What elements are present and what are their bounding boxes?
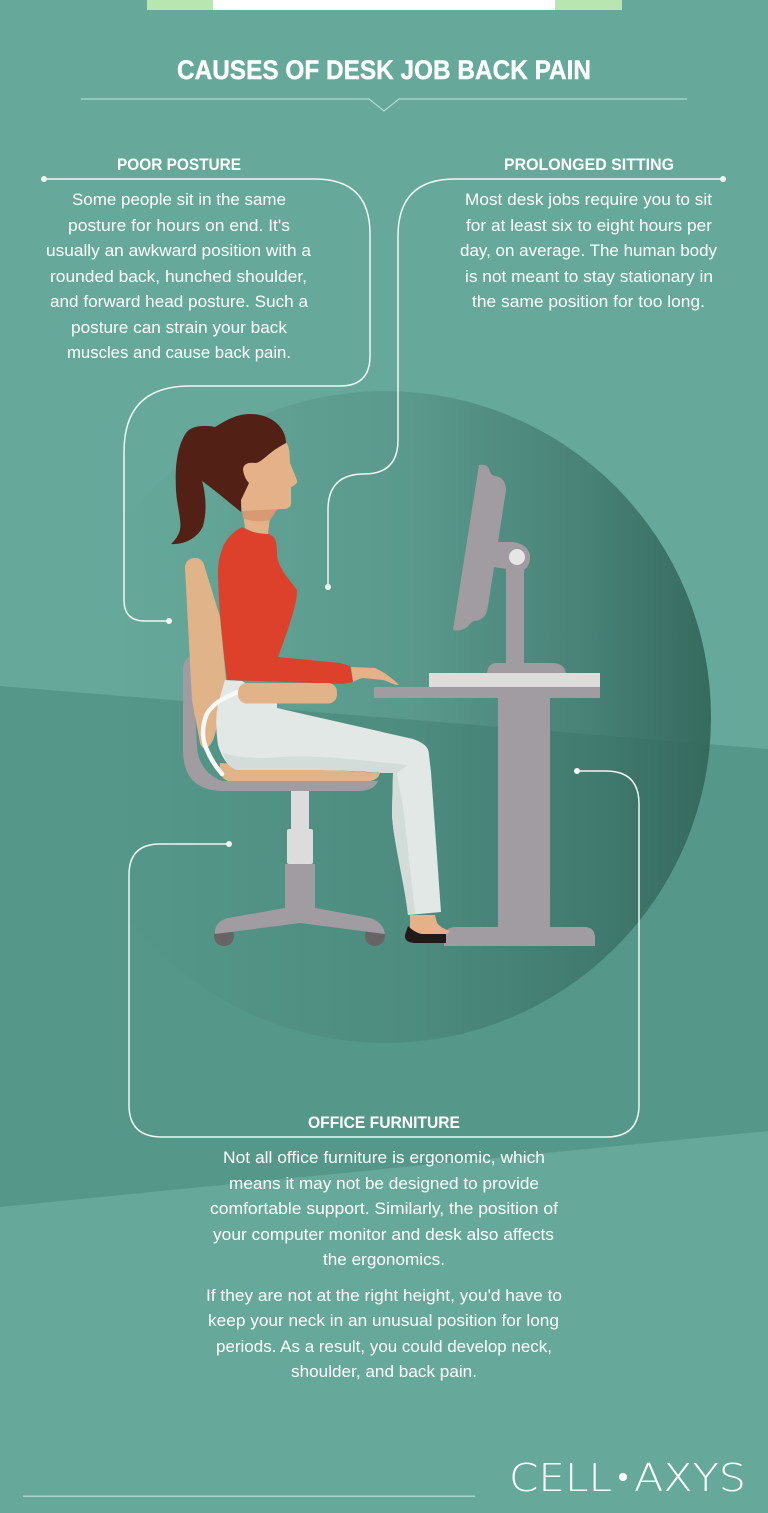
sweater [218,527,353,684]
connector: poor posture [41,176,370,624]
text block: poor posture: muscles and cause back pain. [67,344,291,362]
title rule with chevron [81,99,687,111]
icon: monitor [453,465,530,631]
monitor pivot [509,549,525,565]
chair base [215,864,385,934]
text block: office furniture: If they are not at the right height, you'd have to [206,1287,562,1305]
lumbar support curve [203,692,238,774]
logo [509,1456,746,1500]
connector: office furniture [129,768,639,1137]
text block: poor posture: and forward head posture. Such a [50,293,309,311]
text block: poor posture: Some people sit in the same [72,191,286,209]
text block: poor posture: posture for hours on end. It's [68,217,290,235]
darker diagonal band [0,686,768,1207]
connector: prolonged sitting [325,176,726,590]
neck shadow [242,509,277,521]
shaded circle backdrop [59,391,711,1043]
heading: poor posture: POOR POSTURE [117,156,241,174]
desk top [374,687,600,698]
text block: poor posture: rounded back, hunched shoulder, [50,268,307,286]
footer rule [23,1496,475,1497]
forearm [238,683,337,704]
text block: prolonged sitting: day, on average. The human body [460,242,718,260]
hand [351,667,399,685]
text block: office furniture: your computer monitor and desk also affects [213,1226,554,1244]
title: CAUSES OF DESK JOB BACK PAIN [177,55,591,85]
text block: office furniture: periods. As a result, you could develop neck, [216,1338,552,1356]
desk base [444,927,595,946]
text block: office furniture: Not all office furniture is ergonomic, which [223,1149,545,1167]
text block: office furniture: shoulder, and back pain. [291,1363,477,1381]
illustration: chair and seated woman [171,414,450,946]
keyboard [429,673,600,687]
text block: prolonged sitting [460,191,718,311]
text block: prolonged sitting: the same position for too long. [472,293,705,311]
text block: office furniture [206,1149,562,1381]
chair column [287,791,313,864]
text block: poor posture: usually an awkward position with a [46,242,312,260]
top accent bar [147,0,622,10]
text block: poor posture [46,191,312,362]
shoe [405,926,446,943]
neck [242,505,280,534]
foot [410,915,450,936]
text block: prolonged sitting: is not meant to stay stationary in [465,268,713,286]
hair [171,414,286,544]
chair seat cushion [220,763,380,781]
desk leg [498,698,550,930]
text block: prolonged sitting: Most desk jobs require you to sit [465,191,712,209]
chair wheels [214,926,385,946]
logo: CELL [509,1456,612,1500]
chair frame [183,656,378,791]
chair backrest [185,558,226,748]
logo: AXYS [634,1456,746,1500]
monitor post [506,560,524,665]
head [241,443,297,511]
text block: office furniture: the ergonomics. [323,1251,445,1269]
illustration: desk and monitor [374,465,600,946]
text block: office furniture: means it may not be designed to provide [229,1175,539,1193]
monitor foot [487,663,566,673]
text block: prolonged sitting: for at least six to eight hours per [466,217,713,235]
text block: poor posture: posture can strain your back [71,319,288,337]
text block: office furniture: keep your neck in an unusual position for long [208,1312,559,1330]
heading: office furniture: OFFICE FURNITURE [308,1114,460,1132]
heading: prolonged sitting: PROLONGED SITTING [504,156,674,174]
trousers shading [223,753,415,915]
text block: office furniture: comfortable support. Similarly, the position of [210,1200,558,1218]
trousers [216,680,441,915]
